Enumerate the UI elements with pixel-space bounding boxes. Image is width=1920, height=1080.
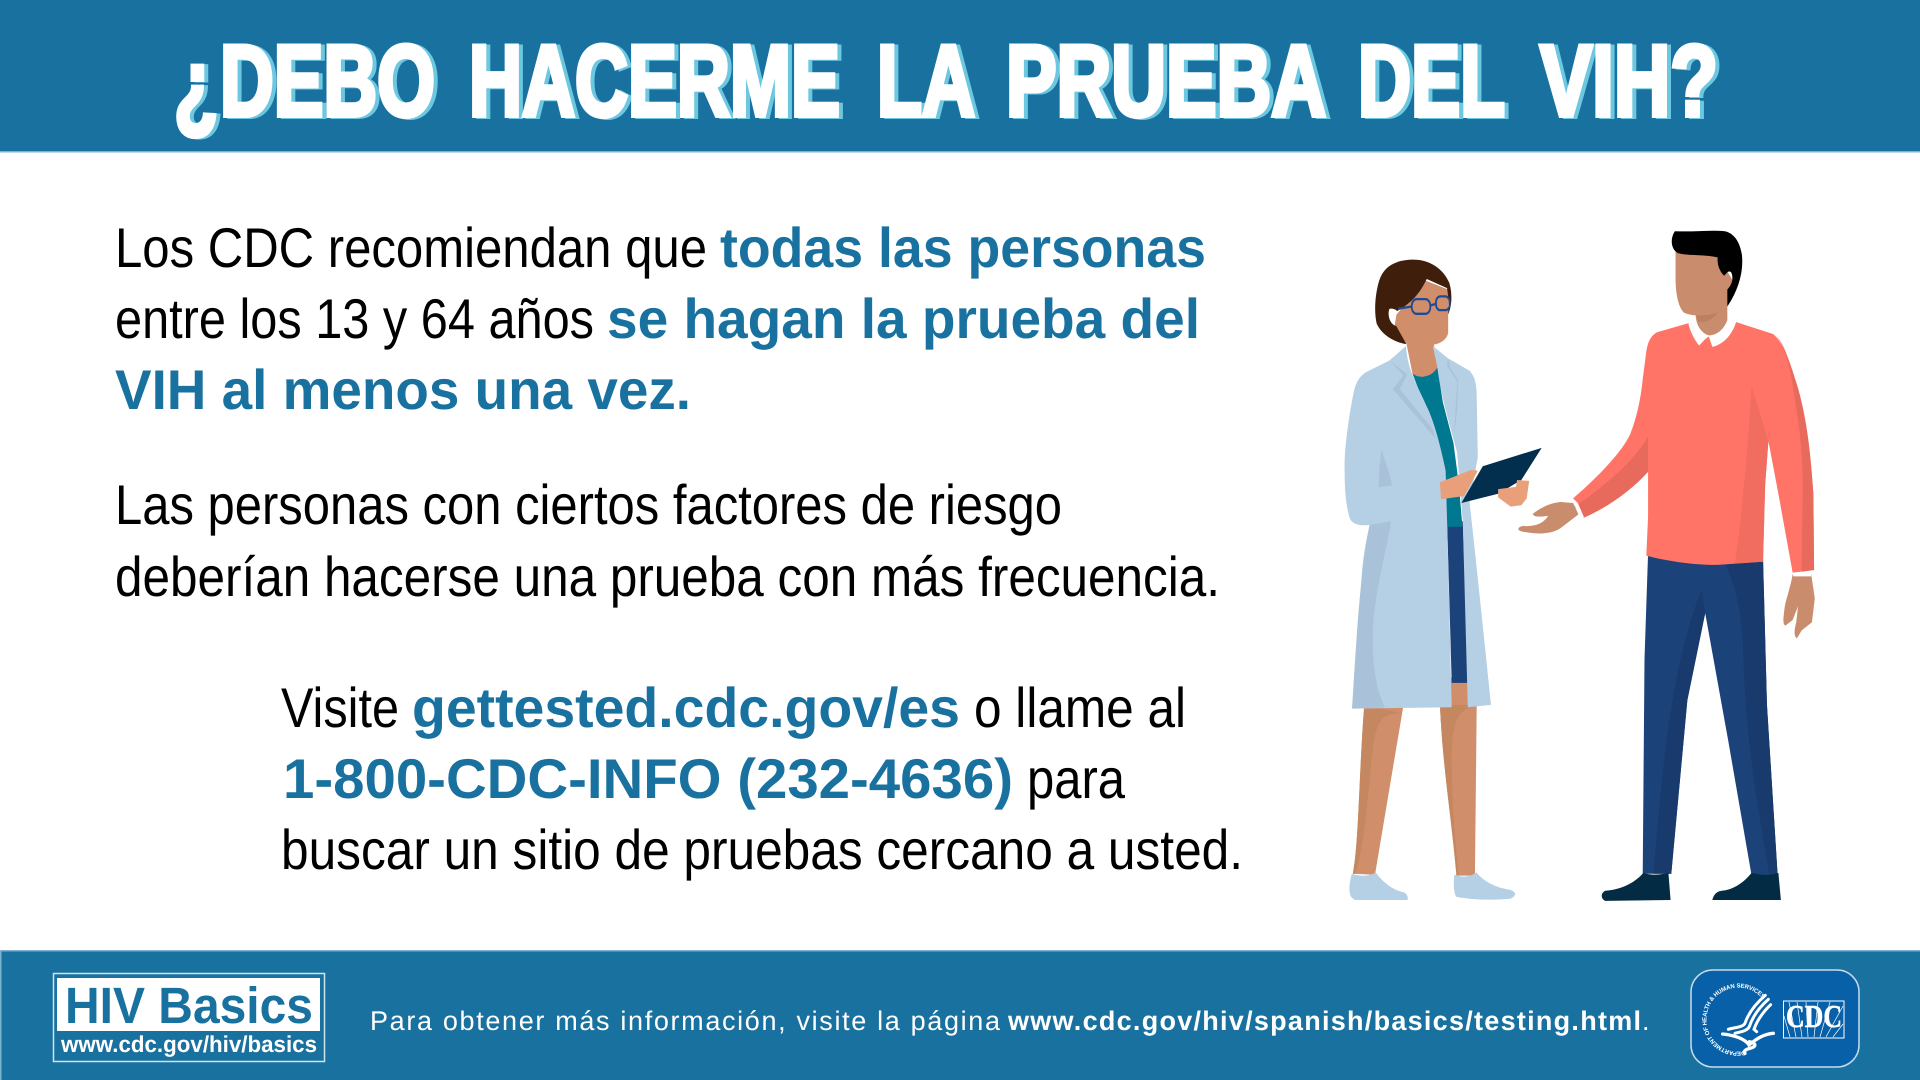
header band	[0, 0, 1920, 152]
badge: HIV Basics: HIV Basics	[65, 977, 313, 1034]
extended hand	[1518, 502, 1578, 533]
title: DEL	[1358, 26, 1505, 138]
head	[1395, 280, 1448, 347]
text block: where to get tested	[281, 676, 1243, 881]
glasses	[1398, 296, 1450, 314]
title: PRUEBA	[1010, 26, 1330, 138]
footer text	[370, 1006, 1650, 1036]
text block: recommendation: se hagan la prueba del	[607, 287, 1200, 350]
title	[174, 26, 1722, 142]
figure: woman doctor	[1345, 260, 1542, 900]
text block: risk factors	[115, 473, 1220, 608]
text block: where to get tested: Visite	[281, 676, 399, 739]
lab coat	[1345, 346, 1491, 709]
CDC mark: CDC	[1786, 998, 1842, 1034]
text block: recommendation: Los CDC recomiendan que	[115, 216, 707, 279]
other hand	[1498, 480, 1529, 507]
title: LA	[877, 26, 975, 138]
head	[1676, 250, 1733, 315]
hair	[1672, 231, 1742, 306]
badge: HIV Basics	[54, 974, 324, 1062]
icon: HHS eagle	[1723, 995, 1773, 1053]
text block: recommendation	[115, 216, 1206, 421]
title: HACERME	[469, 26, 840, 138]
text block: recommendation: todas las personas	[720, 216, 1206, 279]
title: VIH?	[1540, 26, 1718, 138]
collar	[1688, 308, 1736, 347]
footer text: .	[1642, 1006, 1650, 1036]
title: DEBO	[220, 26, 435, 138]
title: LA	[881, 26, 979, 138]
title: ¿	[178, 30, 222, 142]
footer text: Para obtener más información, visite la página	[370, 1006, 1001, 1036]
neck	[1696, 296, 1727, 335]
shoes	[1602, 873, 1781, 901]
text block: where to get tested: o llame al	[974, 676, 1186, 739]
hair	[1375, 260, 1451, 344]
title: VIH?	[1544, 26, 1722, 138]
text block: where to get tested: 1-800-CDC-INFO (232-4636)	[283, 747, 1013, 810]
title: PRUEBA	[1006, 26, 1326, 138]
title: ¿	[174, 30, 218, 142]
shirt	[1412, 368, 1462, 527]
neck	[1405, 338, 1437, 377]
text block: where to get tested: buscar un sitio de pruebas cercano a usted.	[281, 818, 1243, 881]
HHS seal ring text: DEPARTMENT OF HEALTH & HUMAN SERVICES USA	[1702, 983, 1764, 1056]
footer text: www.cdc.gov/hiv/spanish/basics/testing.html	[1007, 1006, 1641, 1036]
text block: where to get tested: gettested.cdc.gov/es	[412, 676, 960, 739]
figure: man	[1518, 231, 1815, 901]
text block: risk factors: Las personas con ciertos factores de riesgo	[115, 473, 1062, 536]
shorts	[1447, 521, 1469, 683]
title: DEBO	[224, 26, 439, 138]
text block: risk factors: deberían hacerse una prueba con más frecuencia.	[115, 545, 1220, 608]
legs	[1353, 677, 1477, 876]
illustration: doctor and patient	[1345, 231, 1815, 901]
arm and hand	[1440, 470, 1478, 499]
title: HACERME	[473, 26, 844, 138]
text block: recommendation: VIH al menos una vez.	[115, 358, 691, 421]
sweater	[1572, 322, 1814, 576]
text block: recommendation: entre los 13 y 64 años	[115, 287, 594, 350]
hanging hand	[1783, 574, 1815, 638]
tablet	[1461, 448, 1542, 503]
shoes	[1349, 872, 1515, 900]
badge: HIV Basics: www.cdc.gov/hiv/basics	[60, 1031, 317, 1057]
text block: where to get tested: para	[1027, 747, 1126, 810]
trousers	[1643, 553, 1778, 876]
title: DEL	[1362, 26, 1509, 138]
